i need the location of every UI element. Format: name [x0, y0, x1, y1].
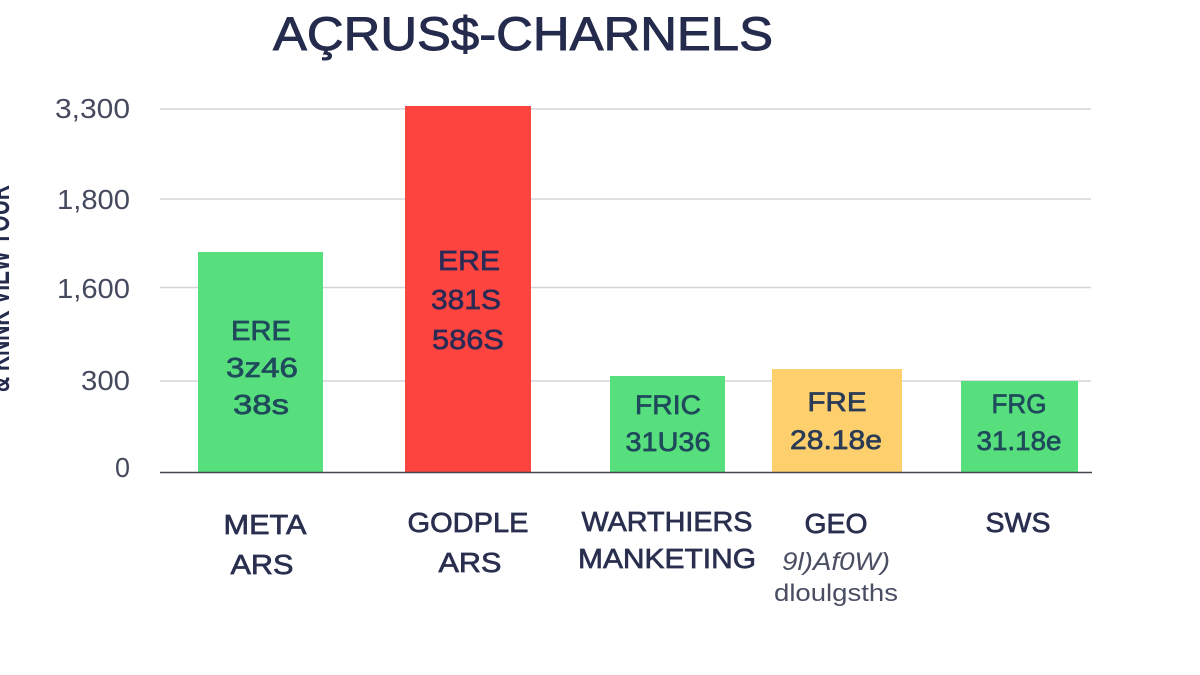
x-axis baseline: [160, 472, 1092, 474]
bar: Google: 381S: [431, 284, 501, 315]
bar: SWS: [961, 381, 1078, 472]
y-axis labels: 1,600: [57, 273, 130, 304]
bar: Meta: [198, 252, 323, 472]
x-axis labels: WARTHIERS: [582, 506, 752, 537]
y-axis labels: 3,300: [55, 93, 130, 124]
y-axis labels: 300: [81, 365, 130, 396]
y-axis labels: [55, 93, 130, 483]
bar: Geo: [772, 369, 902, 472]
x-axis labels: [224, 506, 1050, 607]
bar: Partners marketing: [610, 376, 725, 472]
title: AÇRUS$-CHARNELS: [273, 7, 773, 60]
x-axis labels: GODPLE: [408, 507, 528, 538]
y-axis labels: 1,800: [57, 184, 130, 215]
bar: SWS: FRG: [992, 389, 1046, 419]
bar: Google: [405, 106, 531, 472]
bar: Google: ERE: [438, 245, 500, 276]
bar: Meta: 3z46: [226, 352, 298, 383]
bar: Geo: 28.18e: [790, 425, 882, 455]
x-axis labels: GEO: [804, 508, 868, 539]
y-axis labels: 0: [115, 452, 130, 483]
x-axis labels: SWS: [986, 507, 1050, 538]
bar: Google: 586S: [432, 324, 504, 355]
x-axis labels: META: [224, 509, 307, 540]
x-axis labels: 9l)Af0W): [782, 548, 890, 576]
bar: SWS: 31.18e: [976, 426, 1062, 456]
bar: Partners marketing: FRIC: [635, 390, 701, 420]
x-axis labels: ARS: [230, 549, 294, 580]
x-axis labels: dloulgsths: [774, 580, 898, 607]
bar: Meta: 38s: [233, 389, 289, 420]
bar: Geo: FRE: [808, 387, 866, 417]
bar: Partners marketing: 31U36: [626, 427, 710, 457]
x-axis labels: MANKETING: [578, 543, 756, 574]
bar: Meta: ERE: [231, 315, 291, 346]
x-axis labels: ARS: [438, 547, 502, 578]
